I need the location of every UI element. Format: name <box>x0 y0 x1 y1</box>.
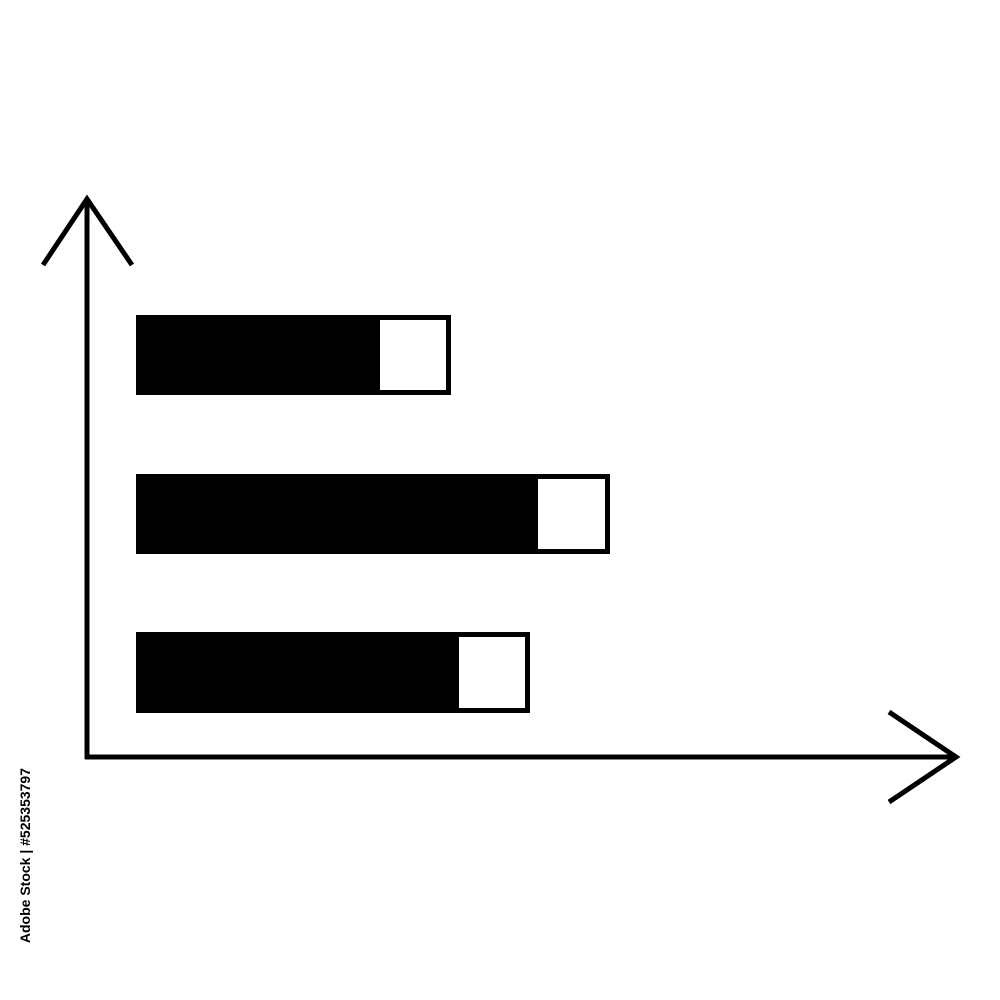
y axis with arrow <box>43 198 132 759</box>
bar 2 <box>136 474 610 554</box>
bar 3 <box>136 632 530 713</box>
bar 1 <box>136 315 451 395</box>
x axis with arrow <box>85 712 956 802</box>
watermark id text: Adobe Stock | #525353797 <box>17 768 33 943</box>
